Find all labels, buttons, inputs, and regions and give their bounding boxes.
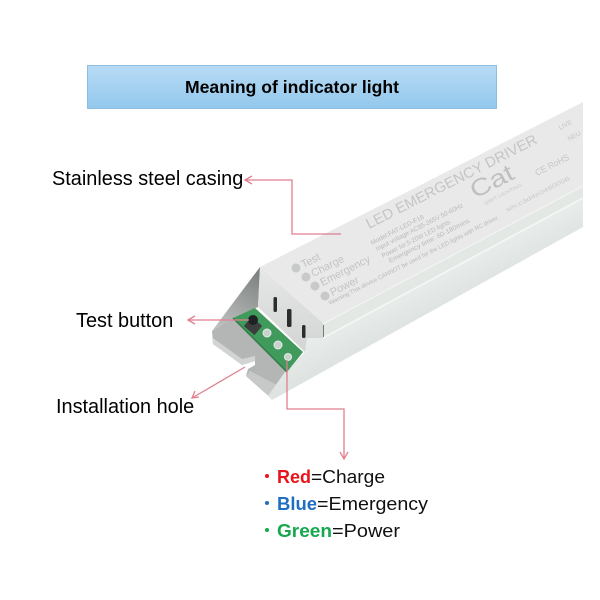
LED emergency driver product bbox=[212, 102, 583, 400]
casing top face bbox=[260, 102, 583, 323]
printed label text: s/n:c3d4e0480006 bbox=[505, 176, 572, 214]
printed label text: Model:FAT-LED-F18 bbox=[370, 214, 426, 247]
legend item: red bbox=[265, 467, 385, 487]
printed label text: LIVE bbox=[558, 119, 574, 132]
arrow: indicator lights bbox=[287, 360, 348, 459]
casing side upper band bbox=[323, 185, 583, 338]
casing front end wall bbox=[258, 267, 323, 352]
ventilation slots bbox=[274, 297, 306, 338]
board edge bbox=[233, 318, 287, 372]
LEDs bbox=[263, 329, 292, 360]
printed label text: CE RoHS bbox=[533, 152, 571, 178]
printed label text: NEU bbox=[567, 130, 582, 143]
title banner bbox=[88, 66, 496, 108]
legend item: blue: Blue bbox=[277, 494, 317, 514]
printed label text: Warning:This device CANNOT be used for the LED lights with RC driver. bbox=[328, 215, 500, 307]
bracket tab bbox=[246, 371, 277, 399]
indicator labels: Power bbox=[328, 274, 361, 299]
label: test button: Test button bbox=[76, 310, 173, 332]
indicator labels: Emergency bbox=[318, 253, 373, 289]
legend item: blue: =Emergency bbox=[317, 494, 428, 514]
printed label text: Emergency time: 60-180mins bbox=[388, 217, 472, 265]
arrow: installation hole bbox=[192, 367, 245, 398]
bracket front lip bbox=[213, 338, 255, 365]
printed label text bbox=[328, 119, 582, 307]
bracket floor bbox=[212, 318, 287, 399]
legend item: blue bbox=[265, 494, 428, 514]
legend item: red: Red bbox=[277, 467, 311, 487]
legend item: green: Green bbox=[277, 521, 332, 541]
circuit board bbox=[233, 308, 303, 372]
title banner: Meaning of indicator light bbox=[185, 77, 399, 97]
printed label text: Input voltage:AC85-265V 50-60Hz bbox=[375, 203, 464, 253]
printed label text: QIBIT LIGHTING bbox=[483, 182, 523, 206]
printed label text: Power for:5-20W LED lights bbox=[381, 219, 452, 260]
legend item: green bbox=[265, 521, 400, 541]
casing side face bbox=[268, 198, 583, 400]
indicator labels: Charge bbox=[309, 253, 346, 280]
casing interior wall bbox=[212, 267, 260, 331]
test switch bbox=[244, 315, 262, 335]
legend item: red: =Charge bbox=[311, 467, 385, 487]
label: installation hole: Installation hole bbox=[56, 396, 194, 418]
arrow: test button bbox=[188, 316, 249, 324]
printed label text: Cat bbox=[465, 159, 519, 204]
indicator labels bbox=[289, 251, 373, 304]
indicator labels: Test bbox=[299, 251, 322, 271]
arrow: stainless steel casing bbox=[245, 176, 341, 234]
printed label text: LED EMERGENCY DRIVER bbox=[364, 132, 540, 233]
legend item: green: =Power bbox=[332, 521, 400, 541]
legend: LED colour meanings bbox=[265, 467, 428, 541]
casing side highlight bbox=[323, 198, 583, 338]
label: stainless steel casing: Stainless steel casing bbox=[52, 168, 243, 190]
casing edge seam bbox=[322, 325, 324, 337]
